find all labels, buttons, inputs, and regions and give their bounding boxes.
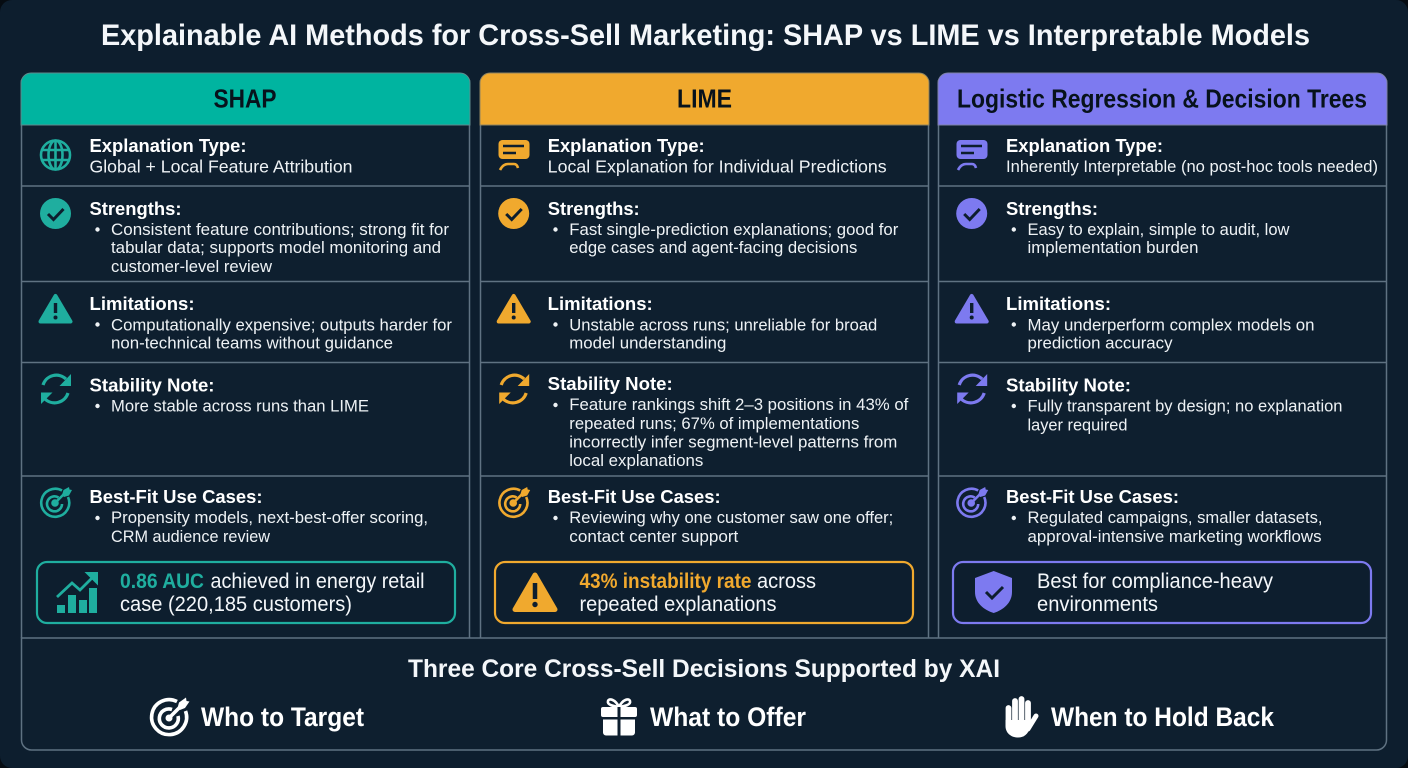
callout: compliance xyxy=(953,562,1371,623)
icon: warning xyxy=(957,296,987,322)
row: stability note: repeated runs; 67% of implementations xyxy=(569,415,859,433)
header: Logistic Regression and Decision Trees xyxy=(938,73,1387,125)
icon: growth chart xyxy=(57,572,98,613)
row: best-fit use cases: Propensity models, next-best-offer scoring, xyxy=(111,509,428,527)
header: LIME: LIME xyxy=(677,84,732,114)
row: strengths: tabular data; supports model monitoring and xyxy=(111,239,441,257)
panel: Logistic Regression and Decision Trees xyxy=(938,73,1387,638)
row: explanation type: Explanation Type: xyxy=(90,135,246,156)
row: limitations: Limitations: xyxy=(548,293,653,314)
row: limitations: model understanding xyxy=(569,334,726,352)
icon: target xyxy=(41,487,72,517)
callout: instability: repeated explanations xyxy=(580,593,776,616)
row: stability note: layer required xyxy=(1028,416,1128,434)
header: SHAP xyxy=(21,73,470,125)
row: best-fit use cases xyxy=(957,486,1322,546)
panel: LIME xyxy=(480,73,929,638)
heading: core decisions: Three Core Cross-Sell Decisions Supported by XAI xyxy=(408,655,1000,683)
header: SHAP: SHAP xyxy=(214,84,276,114)
row: stability note: More stable across runs than LIME xyxy=(111,397,369,415)
row: strengths: customer-level review xyxy=(111,258,272,276)
row: limitations: May underperform complex models on xyxy=(1028,316,1314,334)
row: best-fit use cases: contact center support xyxy=(569,528,739,546)
panel: SHAP xyxy=(21,73,470,638)
row: stability note xyxy=(41,374,369,415)
icon: sync arrows xyxy=(957,374,987,404)
icon: sync arrows xyxy=(499,374,529,404)
row: explanation type: Local Explanation for Individual Predictions xyxy=(548,156,887,176)
callout: instability: 43% instability rate xyxy=(580,570,752,593)
icon: hand xyxy=(1006,699,1036,738)
icon: gift xyxy=(601,699,637,736)
row: explanation type: Global + Local Feature Attribution xyxy=(90,156,352,176)
row: best-fit use cases xyxy=(41,486,428,546)
row: strengths xyxy=(40,198,450,276)
row: best-fit use cases: Best-Fit Use Cases: xyxy=(548,486,721,507)
row: explanation type xyxy=(956,135,1378,176)
row: limitations: Computationally expensive; outputs harder for xyxy=(111,316,453,334)
row: strengths: Strengths: xyxy=(90,198,182,219)
decision: what to offer: What to Offer xyxy=(650,702,806,732)
row: limitations: Unstable across runs; unreliable for broad xyxy=(569,316,877,334)
icon: check circle xyxy=(498,198,529,229)
icon: explanation card xyxy=(498,140,530,170)
row: stability note: Fully transparent by design; no explanation xyxy=(1028,397,1342,415)
row: strengths: Strengths: xyxy=(1006,198,1098,219)
callout: instability: across xyxy=(757,570,816,593)
row: stability note: Stability Note: xyxy=(1006,374,1131,396)
icon: warning large xyxy=(515,575,555,610)
icon: target white xyxy=(152,698,190,735)
row: stability note: Stability Note: xyxy=(90,374,214,396)
icon: sync arrows xyxy=(41,374,71,404)
row: best-fit use cases xyxy=(499,486,893,546)
row: best-fit use cases: CRM audience review xyxy=(111,528,270,546)
row: stability note: incorrectly infer segment-level patterns from xyxy=(569,434,897,452)
row: strengths: Fast single-prediction explanations; good for xyxy=(569,221,899,239)
row: limitations xyxy=(40,293,453,352)
row: explanation type xyxy=(498,135,887,176)
row: strengths xyxy=(498,198,899,257)
icon: explanation card xyxy=(956,140,988,170)
row: limitations: Limitations: xyxy=(1006,293,1111,314)
icon: globe xyxy=(41,140,70,170)
row: explanation type xyxy=(41,135,352,176)
decision: who to target xyxy=(152,698,364,735)
row: limitations xyxy=(957,293,1314,352)
callout: instability xyxy=(495,562,913,623)
icon: warning xyxy=(40,296,70,322)
row: stability note: Feature rankings shift 2–3 positions in 43% of xyxy=(569,396,909,414)
callout: AUC: case (220,185 customers) xyxy=(120,593,352,616)
title: Explainable AI Methods for Cross-Sell Marketing: SHAP vs LIME vs Interpretable Models xyxy=(101,19,1310,52)
row: best-fit use cases: Best-Fit Use Cases: xyxy=(1006,486,1179,507)
row: strengths xyxy=(956,198,1290,257)
row: explanation type: Explanation Type: xyxy=(548,135,705,156)
icon: target xyxy=(957,487,988,517)
row: best-fit use cases: Best-Fit Use Cases: xyxy=(90,486,262,507)
callout: AUC: 0.86 AUC xyxy=(120,570,204,593)
row: strengths: Consistent feature contributions; strong fit for xyxy=(111,221,450,239)
row: strengths: implementation burden xyxy=(1028,239,1198,257)
icon: check circle xyxy=(40,198,71,229)
decision: who to target: Who to Target xyxy=(201,702,364,732)
callout: compliance: Best for compliance-heavy xyxy=(1037,570,1273,593)
row: best-fit use cases: approval-intensive marketing workflows xyxy=(1028,528,1322,546)
row: limitations: prediction accuracy xyxy=(1028,334,1173,352)
icon: shield xyxy=(975,571,1012,613)
row: explanation type: Explanation Type: xyxy=(1006,135,1163,156)
icon: target xyxy=(499,487,530,517)
row: limitations: Limitations: xyxy=(90,293,194,314)
row: limitations: non-technical teams without guidance xyxy=(111,334,393,352)
row: strengths: Strengths: xyxy=(548,198,640,219)
header: LIME xyxy=(480,73,929,125)
callout: AUC: achieved in energy retail xyxy=(210,570,424,593)
row: limitations xyxy=(499,293,877,352)
row: strengths: edge cases and agent-facing decisions xyxy=(569,239,857,257)
row: strengths: Easy to explain, simple to audit, low xyxy=(1028,221,1290,239)
row: stability note xyxy=(499,373,909,470)
icon: check circle xyxy=(956,198,987,229)
row: best-fit use cases: Regulated campaigns, smaller datasets, xyxy=(1028,509,1322,527)
row: stability note xyxy=(957,374,1342,434)
row: explanation type: Inherently Interpretable (no post-hoc tools needed) xyxy=(1006,158,1378,176)
decision: when to hold back: When to Hold Back xyxy=(1051,702,1275,732)
callout: AUC xyxy=(37,562,455,623)
decision: when to hold back xyxy=(1006,699,1275,738)
row: best-fit use cases: Reviewing why one customer saw one offer; xyxy=(569,509,893,527)
decision: what to offer xyxy=(601,699,806,736)
row: stability note: local explanations xyxy=(569,452,703,470)
callout: compliance: environments xyxy=(1037,593,1158,616)
panel: core decisions xyxy=(22,638,1387,750)
icon: warning xyxy=(499,296,529,322)
row: stability note: Stability Note: xyxy=(548,373,673,394)
